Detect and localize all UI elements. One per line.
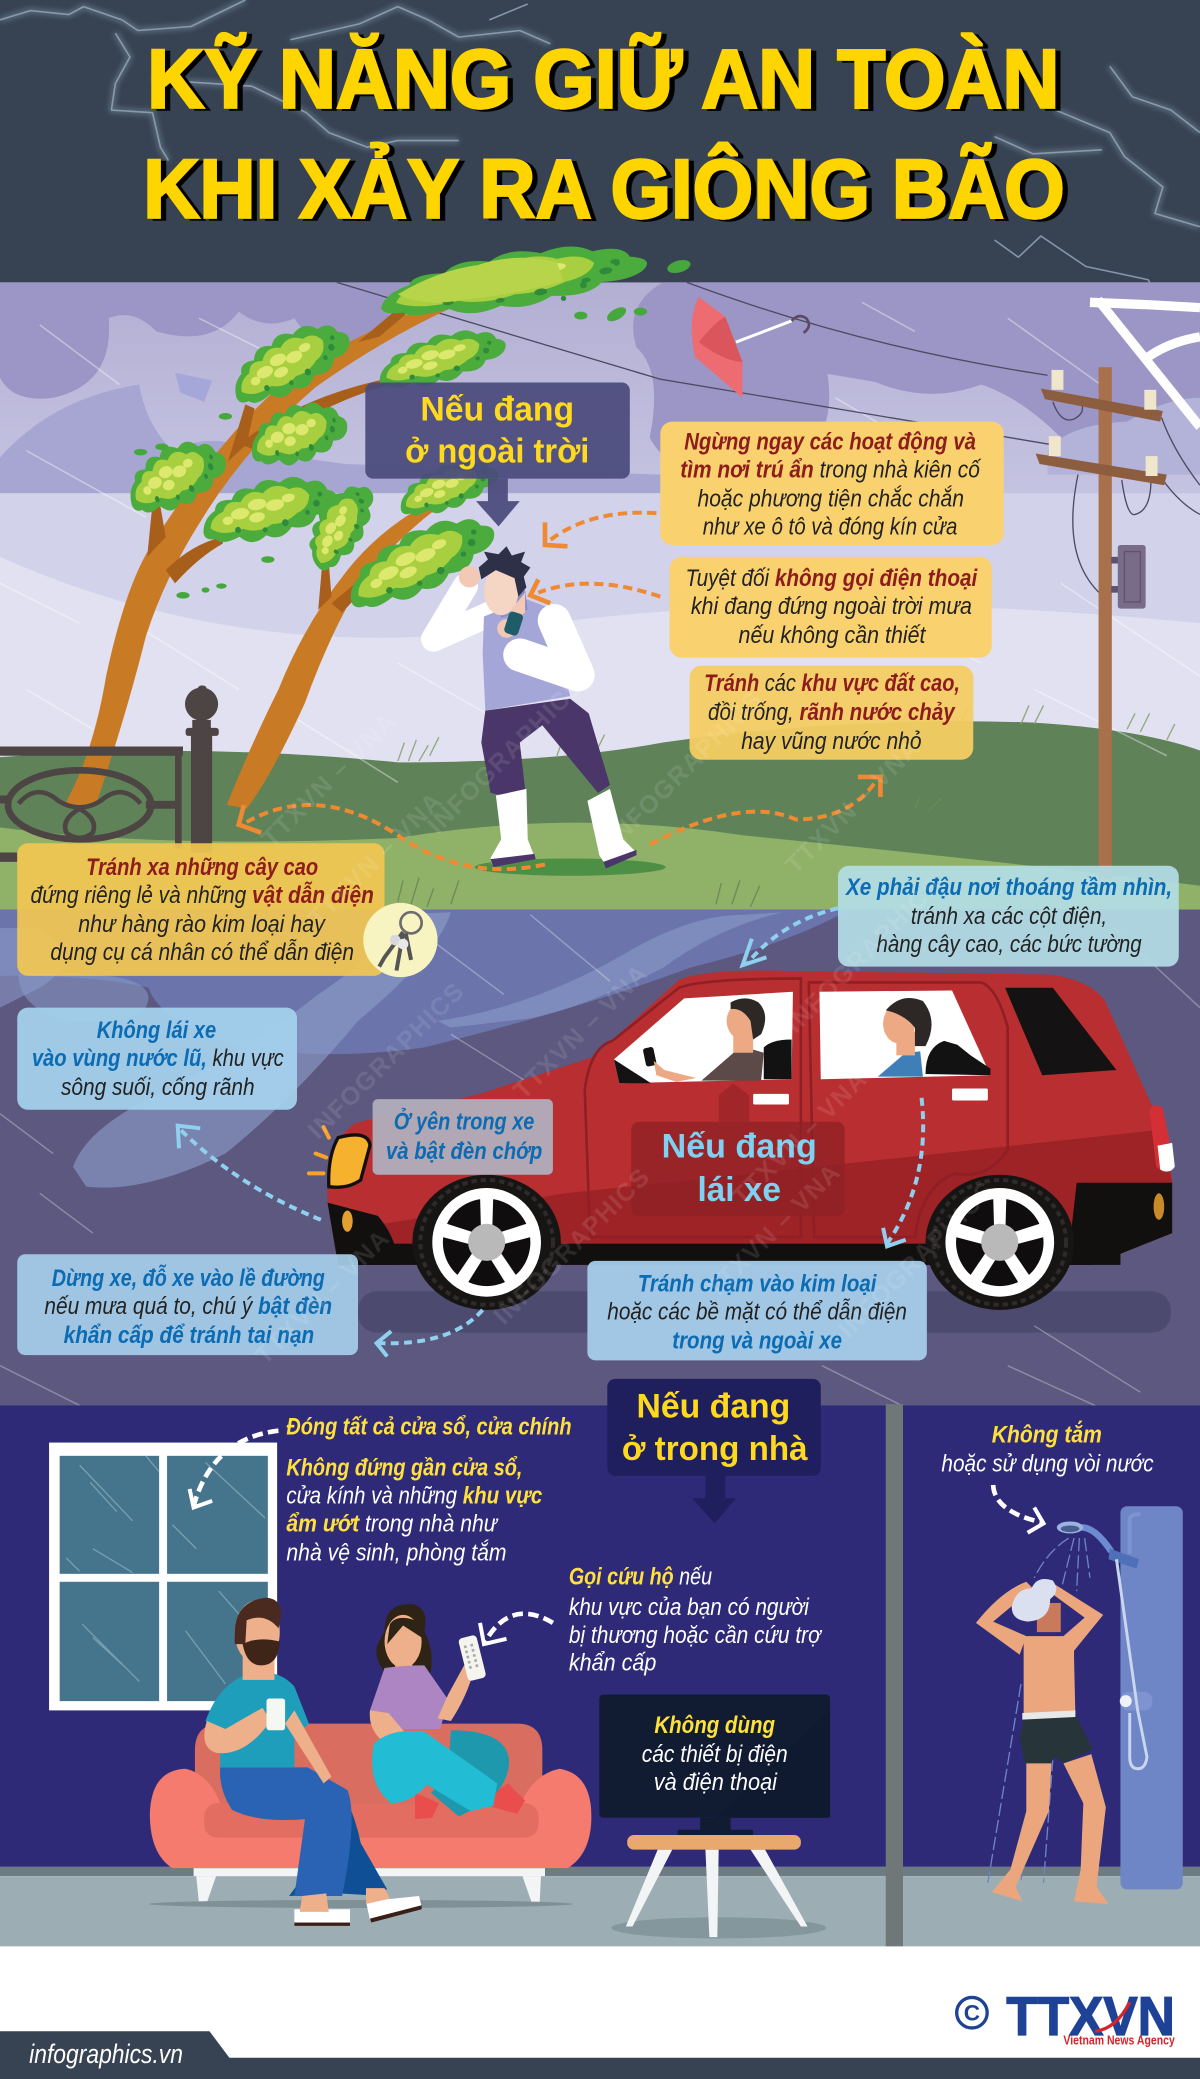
callout: avoid metal xyxy=(587,1261,927,1360)
panel: indoor room xyxy=(0,1404,1200,1946)
arrow: orange to tree xyxy=(239,805,545,869)
callout: seek shelter: hoặc phương tiện chắc chắn xyxy=(697,485,964,512)
icon: umbrella xyxy=(574,258,809,398)
watermarks: TTXVN – VNA xyxy=(508,959,654,1105)
panel: driving heading xyxy=(631,1122,845,1216)
arrow: indoor heading xyxy=(692,1476,736,1523)
watermarks: INFOGRAPHICS xyxy=(833,1176,1001,1343)
callout: seek shelter: tìm nơi trú ẩn trong nhà kiên cố xyxy=(680,456,981,483)
driver xyxy=(614,998,792,1083)
car windows xyxy=(614,988,1116,1083)
panel: road xyxy=(0,910,1200,1408)
panel: indoor heading: ở trong nhà xyxy=(622,1430,808,1468)
watermarks: TTXVN – VNA xyxy=(780,733,926,879)
callout: avoid high ground: đồi trống, rãnh nước chảy xyxy=(708,699,956,726)
icon: shower xyxy=(988,1506,1183,1889)
arrow: blue to metal xyxy=(883,1098,923,1246)
callout: no phone calls: khi đang đứng ngoài trời mưa xyxy=(691,593,972,620)
callout: seek shelter: như xe ô tô và đóng kín cửa xyxy=(703,513,957,540)
icon: man showering xyxy=(976,1579,1109,1904)
lightning bolts xyxy=(0,0,1200,227)
callout: park in open area: hàng cây cao, các bức tường xyxy=(876,931,1142,958)
title xyxy=(143,31,1065,235)
icon: man in the wind xyxy=(434,546,666,876)
arrow: orange to shelter xyxy=(545,513,656,546)
callout: avoid tall trees: dụng cụ cá nhân có thể dẫn điện xyxy=(50,938,354,966)
watermarks: TTXVN – VNA xyxy=(727,1065,873,1211)
watermarks: INFOGRAPHICS xyxy=(303,977,470,1145)
headlight xyxy=(309,1127,370,1232)
callout: no phone calls xyxy=(670,557,992,658)
text: stay away from windows: ẩm ướt trong nhà như xyxy=(286,1510,499,1537)
panel: driving heading: lái xe xyxy=(697,1171,781,1209)
text: stay away from windows: nhà vệ sinh, phòng tắm xyxy=(286,1540,507,1567)
callout: avoid metal: hoặc các bề mặt có thể dẫn điện xyxy=(607,1297,907,1325)
logo: TTXVN: Vietnam News Agency xyxy=(1063,2033,1175,2048)
text: no electronics: các thiết bị điện xyxy=(642,1741,788,1768)
text: call rescue: khu vực của bạn có người xyxy=(569,1594,809,1621)
icon: television xyxy=(599,1694,830,1836)
text: stay away from windows: cửa kính và những khu vực xyxy=(286,1483,542,1510)
text: no electronics: Không dùng xyxy=(654,1712,775,1739)
text: no electronics: và điện thoại xyxy=(654,1769,778,1796)
watermarks: INFOGRAPHICS xyxy=(780,871,948,1038)
callout: seek shelter: Ngừng ngay các hoạt động và xyxy=(684,428,976,455)
watermarks: TTXVN – VNA xyxy=(250,1224,396,1370)
callout: no phone calls: nếu không cần thiết xyxy=(739,622,927,649)
icon: bending trees xyxy=(64,234,651,809)
callout: avoid metal: Tránh chạm vào kim loại xyxy=(638,1270,878,1297)
text: call rescue: khẩn cấp xyxy=(569,1650,656,1677)
text: call rescue: bị thương hoặc cần cứu trợ xyxy=(569,1622,823,1649)
callout: avoid high ground: Tránh các khu vực đất cao, xyxy=(704,670,960,697)
text: stay away from windows: Không đứng gần cửa sổ, xyxy=(286,1455,522,1482)
panel: indoor heading: Nếu đang xyxy=(636,1387,790,1425)
text: no showering: hoặc sử dụng vòi nước xyxy=(941,1451,1154,1478)
callout: no flood driving xyxy=(17,1008,297,1110)
callout: avoid metal: trong và ngoài xe xyxy=(672,1327,842,1354)
callout: pull over: nếu mưa quá to, chú ý bật đèn xyxy=(44,1293,332,1320)
panel: outdoor scene xyxy=(0,282,1200,928)
text: stay away from windows xyxy=(286,1455,542,1567)
icon: iron fence xyxy=(0,685,219,862)
arrow: blue to roadside xyxy=(377,1310,483,1356)
tail light xyxy=(1150,1105,1175,1220)
callout: stay in car: và bật đèn chớp xyxy=(386,1138,542,1165)
logo: TTXVN: TTXVN xyxy=(1006,1986,1175,2047)
callout: seek shelter xyxy=(660,422,1004,545)
panel: driving heading: Nếu đang xyxy=(662,1128,817,1166)
callout: avoid tall trees: đứng riêng lẻ và những vật dẫn điện xyxy=(30,882,374,909)
wheels xyxy=(412,1175,561,1310)
paper debris xyxy=(175,373,212,402)
logo: TTXVN: C xyxy=(964,2001,980,2026)
callout: no flood driving: Không lái xe xyxy=(97,1017,216,1044)
passenger xyxy=(878,998,990,1077)
panel: storm header xyxy=(0,0,1200,375)
arrow: outdoor heading xyxy=(476,479,520,526)
text: no showering: Không tắm xyxy=(992,1421,1102,1449)
storm clouds xyxy=(0,282,1200,481)
callout: stay in car xyxy=(373,1099,553,1175)
panel: outdoor heading: ở ngoài trời xyxy=(405,433,589,471)
door frames xyxy=(585,979,1008,1237)
callout: avoid tall trees xyxy=(17,843,385,976)
icon: red car xyxy=(309,971,1175,1310)
icon: window xyxy=(49,1443,277,1710)
callout: no flood driving: vào vùng nước lũ, khu vực xyxy=(32,1045,284,1072)
callout: avoid tall trees: như hàng rào kim loại hay xyxy=(78,911,327,938)
arrow: white to shower xyxy=(993,1485,1044,1533)
watermarks: INFOGRAPHICS xyxy=(601,685,769,853)
white window frame debris xyxy=(1090,300,1200,427)
text: no showering xyxy=(941,1421,1154,1478)
arrow: blue to parked car xyxy=(743,908,838,965)
title: KHI XẢY RA GIÔNG BÃO xyxy=(143,141,1065,235)
hills xyxy=(0,721,1200,928)
icon: tv table xyxy=(611,1835,826,1938)
arrow: blue to flood xyxy=(178,1126,321,1220)
arrow: white to window xyxy=(190,1431,278,1508)
watermarks: TTXVN – VNA xyxy=(256,707,402,853)
callout: avoid high ground: hay vũng nước nhỏ xyxy=(741,728,922,755)
callout: no flood driving: sông suối, cống rãnh xyxy=(61,1074,255,1101)
callout: avoid high ground xyxy=(690,666,973,760)
text: call rescue xyxy=(569,1563,823,1677)
arrow: white to remote xyxy=(480,1614,553,1644)
icon: keys xyxy=(363,903,438,977)
icon: man on sofa xyxy=(204,1598,422,1926)
callout: pull over: khẩn cấp để tránh tai nạn xyxy=(64,1322,314,1349)
power pole xyxy=(337,282,1200,879)
callout: park in open area xyxy=(838,866,1179,967)
text: close windows: Đóng tất cả cửa sổ, cửa chính xyxy=(286,1414,571,1441)
footer bar xyxy=(0,1946,1200,2079)
text: no electronics xyxy=(642,1712,788,1796)
icon: woman on sofa xyxy=(370,1604,525,1819)
panel: outdoor heading xyxy=(365,383,630,526)
callout: park in open area: tránh xa các cột điện, xyxy=(911,903,1107,930)
watermarks: TTXVN – VNA xyxy=(303,786,449,932)
panel: indoor heading xyxy=(607,1379,821,1523)
callout: stay in car: Ở yên trong xe xyxy=(394,1108,534,1136)
panel: outdoor heading: Nếu đang xyxy=(420,390,574,428)
footer website: infographics.vn xyxy=(29,2039,183,2069)
text: call rescue: Gọi cứu hộ nếu xyxy=(569,1563,712,1590)
arrow: orange to high ground xyxy=(650,777,880,845)
callout: no phone calls: Tuyệt đối không gọi điện thoại xyxy=(686,565,978,592)
callout: pull over xyxy=(17,1254,358,1355)
callout: pull over: Dừng xe, đỗ xe vào lề đường xyxy=(52,1264,325,1292)
icon: sofa xyxy=(149,1724,591,1908)
watermarks: TTXVN – VNA xyxy=(700,1158,846,1304)
callout: avoid tall trees: Tránh xa những cây cao xyxy=(86,854,318,881)
rain streaks xyxy=(0,302,1200,782)
title: KỸ NĂNG GIỮ AN TOÀN xyxy=(147,31,1059,125)
watermarks: INFOGRAPHICS xyxy=(422,672,590,840)
watermarks: INFOGRAPHICS xyxy=(488,1163,656,1330)
watermarks xyxy=(250,672,1001,1370)
arrow: orange to phone xyxy=(530,579,660,603)
